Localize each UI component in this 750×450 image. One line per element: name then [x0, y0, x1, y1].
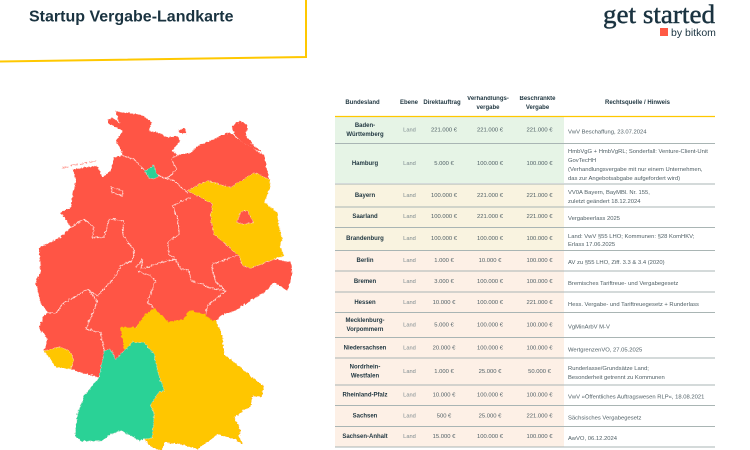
row: Hessen: Hess. Vergabe- und Tariftreuegesetz + Runderlass — [568, 302, 699, 308]
row: Bayern: Land — [403, 193, 416, 199]
row: Saarland: Land — [403, 214, 416, 220]
row: Bremen: 3.000 € — [434, 279, 454, 285]
row: Nordrhein-Westfalen: Besonderheit getrennt zu Kommunen — [568, 375, 665, 381]
row: Saarland: Vergabeerlass 2025 — [568, 216, 620, 222]
row: Niedersachsen — [344, 346, 642, 354]
row: Baden-Württemberg: 221.000 € — [477, 128, 504, 134]
row: Baden-Württemberg: 221.000 € — [431, 128, 458, 134]
row: Saarland — [352, 214, 620, 222]
Bayern — [120, 307, 263, 450]
row: Bremen: 100.000 € — [526, 279, 553, 285]
row: Sachsen: Sächsisches Vergabegesetz — [568, 416, 641, 422]
row: Mecklenburg-Vorpommern: VgMinArbV M-V — [568, 324, 610, 330]
row: Bremen — [354, 279, 678, 287]
row: Rheinland-Pfalz: 10.000 € — [433, 392, 456, 398]
row: Mecklenburg-Vorpommern: 100.000 € — [477, 322, 504, 328]
table header: Verhandlungs- — [467, 96, 509, 102]
row: Bayern: VV0A Bayern, BayMBl. Nr. 155, — [568, 190, 650, 196]
row: Hamburg: Land — [403, 161, 416, 167]
row: Sachsen: Land — [403, 414, 416, 420]
row: Sachsen-Anhalt: AwVO, 06.12.2024 — [568, 436, 618, 442]
row: Saarland: 221.000 € — [526, 214, 553, 220]
row: Niedersachsen: 20.000 € — [433, 346, 456, 352]
table header: Vergabe — [526, 105, 550, 111]
row: Rheinland-Pfalz: Land — [403, 392, 416, 398]
row: Bremen: Bremisches Tariftreue- und Vergabegesetz — [568, 281, 678, 287]
row: Sachsen-Anhalt: 100.000 € — [477, 434, 504, 440]
row: Saarland: 100.000 € — [431, 214, 458, 220]
row: Brandenburg: Brandenburg — [346, 236, 384, 242]
row: Saarland: 221.000 € — [477, 214, 504, 220]
row: Hessen: 10.000 € — [433, 300, 456, 306]
row: Berlin: 100.000 € — [526, 258, 553, 264]
Hamburg — [143, 164, 158, 178]
row: Berlin: 1.000 € — [434, 258, 454, 264]
row: Nordrhein-Westfalen: Land — [403, 369, 416, 375]
row: Berlin: Berlin — [356, 258, 374, 264]
table header: vergabe — [476, 105, 500, 111]
row: Bremen: Land — [403, 279, 416, 285]
row: Mecklenburg-Vorpommern: Mecklenburg- — [345, 318, 385, 324]
row: Bayern: 221.000 € — [526, 193, 553, 199]
row: Sachsen-Anhalt: 100.000 € — [526, 434, 553, 440]
row: Berlin: Land — [403, 258, 416, 264]
state borders — [47, 154, 237, 350]
row: Niedersachsen: 100.000 € — [526, 346, 553, 352]
row: Nordrhein-Westfalen: Runderlasse/Grundsätze Land; — [568, 366, 649, 372]
row: Nordrhein-Westfalen: 1.000 € — [434, 369, 454, 375]
islands — [107, 117, 262, 152]
row: Hessen: 100.000 € — [477, 300, 504, 306]
row: Mecklenburg-Vorpommern: Land — [403, 322, 416, 328]
row: Niedersachsen: WertgrenzenVO, 27.05.2025 — [568, 348, 642, 354]
row: Niedersachsen: Land — [403, 346, 416, 352]
row: Sachsen-Anhalt: 15.000 € — [433, 434, 456, 440]
row: Brandenburg: 100.000 € — [526, 236, 553, 242]
row: Hamburg: GovTecHH — [568, 158, 596, 164]
row: Saarland: Saarland — [352, 214, 378, 220]
logo: get started by bitkom: by bitkom — [671, 27, 716, 39]
row: Hessen — [354, 300, 699, 308]
row: Sachsen: Sachsen — [353, 414, 378, 420]
row: Baden-Württemberg: 221.000 € — [526, 128, 553, 134]
table header: Rechtsquelle / Hinweis — [605, 100, 671, 106]
row: Nordrhein-Westfalen: 25.000 € — [479, 369, 502, 375]
row: Bayern: 100.000 € — [431, 193, 458, 199]
row: Nordrhein-Westfalen: Westfalen — [351, 374, 379, 380]
table header: Ebene — [400, 100, 419, 106]
row: Brandenburg — [346, 234, 695, 248]
table header: Direktauftrag — [423, 100, 461, 106]
row: Bayern: 221.000 € — [477, 193, 504, 199]
row: Mecklenburg-Vorpommern: Vorpommern — [347, 327, 384, 333]
row: Baden-Württemberg: Baden- — [355, 123, 375, 129]
row: Hamburg: HmbVgG + HmbVgRL; Sonderfall: Venture-Client-Unit — [568, 149, 708, 155]
row backgrounds — [335, 117, 564, 447]
row: Hamburg: 5.000 € — [434, 161, 454, 167]
row: Hessen: Hessen — [354, 300, 376, 306]
map base: red states — [35, 111, 292, 450]
row: Berlin — [356, 258, 665, 266]
row: Rheinland-Pfalz: 100.000 € — [526, 392, 553, 398]
row: Bayern: zuletzt geändert 18.12.2024 — [568, 199, 641, 205]
row: Hamburg: Hamburg — [352, 161, 378, 167]
row: Mecklenburg-Vorpommern — [345, 318, 610, 333]
map of Germany — [35, 111, 292, 450]
row: Nordrhein-Westfalen — [350, 364, 665, 381]
table header — [345, 96, 671, 111]
row: Rheinland-Pfalz: VwV »Öffentliches Auftragswesen RLP«, 18.08.2021 — [568, 394, 704, 400]
row: Hamburg: 100.000 € — [477, 161, 504, 167]
row dividers — [335, 144, 715, 447]
row: Baden-Württemberg: Land — [403, 128, 416, 134]
row: Bayern — [355, 190, 650, 205]
row: Niedersachsen: 100.000 € — [477, 346, 504, 352]
header frame — [0, 0, 306, 62]
row: Rheinland-Pfalz: Rheinland-Pfalz — [342, 392, 388, 398]
row: Mecklenburg-Vorpommern: 100.000 € — [526, 322, 553, 328]
row: Brandenburg: Land — [403, 236, 416, 242]
row: Baden-Württemberg: VwV Beschaffung, 23.07.2024 — [568, 130, 647, 136]
table — [335, 96, 715, 447]
row: Rheinland-Pfalz — [342, 392, 704, 400]
table header: Bundesland — [345, 100, 380, 106]
Brandenburg — [187, 172, 283, 267]
row: Hessen: 221.000 € — [526, 300, 553, 306]
row: Bremen: Bremen — [354, 279, 377, 285]
row: Brandenburg: Erlass 17.06.2025 — [568, 242, 615, 248]
header rule — [335, 116, 715, 118]
row: Sachsen: 500 € — [437, 414, 452, 420]
row: Bayern: Bayern — [355, 193, 376, 199]
row: Hamburg: (Verhandlungsvergabe mit nur einem Unternehmen, — [568, 167, 703, 173]
row: Sachsen: 25.000 € — [479, 414, 502, 420]
row: Hamburg — [352, 149, 708, 182]
row: Berlin: 10.000 € — [479, 258, 502, 264]
Saarland — [43, 346, 73, 368]
row: Sachsen-Anhalt: Land — [403, 434, 416, 440]
row: Hamburg: das zur Angebotsabgabe aufgefordert wird) — [568, 176, 680, 182]
row: Bremen: 100.000 € — [477, 279, 504, 285]
row: Hamburg: 100.000 € — [526, 161, 553, 167]
title: Startup Vergabe-Landkarte — [29, 8, 234, 26]
row: Sachsen-Anhalt: Sachsen-Anhalt — [342, 434, 388, 440]
table header: Beschränkte — [519, 96, 556, 102]
row: Brandenburg: 100.000 € — [431, 236, 458, 242]
row: Rheinland-Pfalz: 100.000 € — [477, 392, 504, 398]
row: Brandenburg: 100.000 € — [477, 236, 504, 242]
Baden-Württemberg — [74, 342, 163, 441]
row: Sachsen-Anhalt — [342, 434, 618, 442]
row: Niedersachsen: Niedersachsen — [344, 346, 387, 352]
row: Sachsen — [353, 414, 641, 422]
row: Berlin: AV zu §55 LHO, Ziff. 3.3 & 3.4 (2020) — [568, 260, 665, 266]
row: Nordrhein-Westfalen: 50.000 € — [528, 369, 552, 375]
row: Brandenburg: Land: VwV §55 LHO; Kommunen: §28 KomHKV; — [568, 234, 695, 240]
row: Mecklenburg-Vorpommern: 5.000 € — [434, 322, 454, 328]
row: Sachsen: 221.000 € — [526, 414, 553, 420]
row: Hessen: Land — [403, 300, 416, 306]
row: Baden-Württemberg: Württemberg — [346, 132, 384, 138]
row: Nordrhein-Westfalen: Nordrhein- — [350, 364, 380, 370]
row: Baden-Württemberg — [346, 123, 647, 138]
